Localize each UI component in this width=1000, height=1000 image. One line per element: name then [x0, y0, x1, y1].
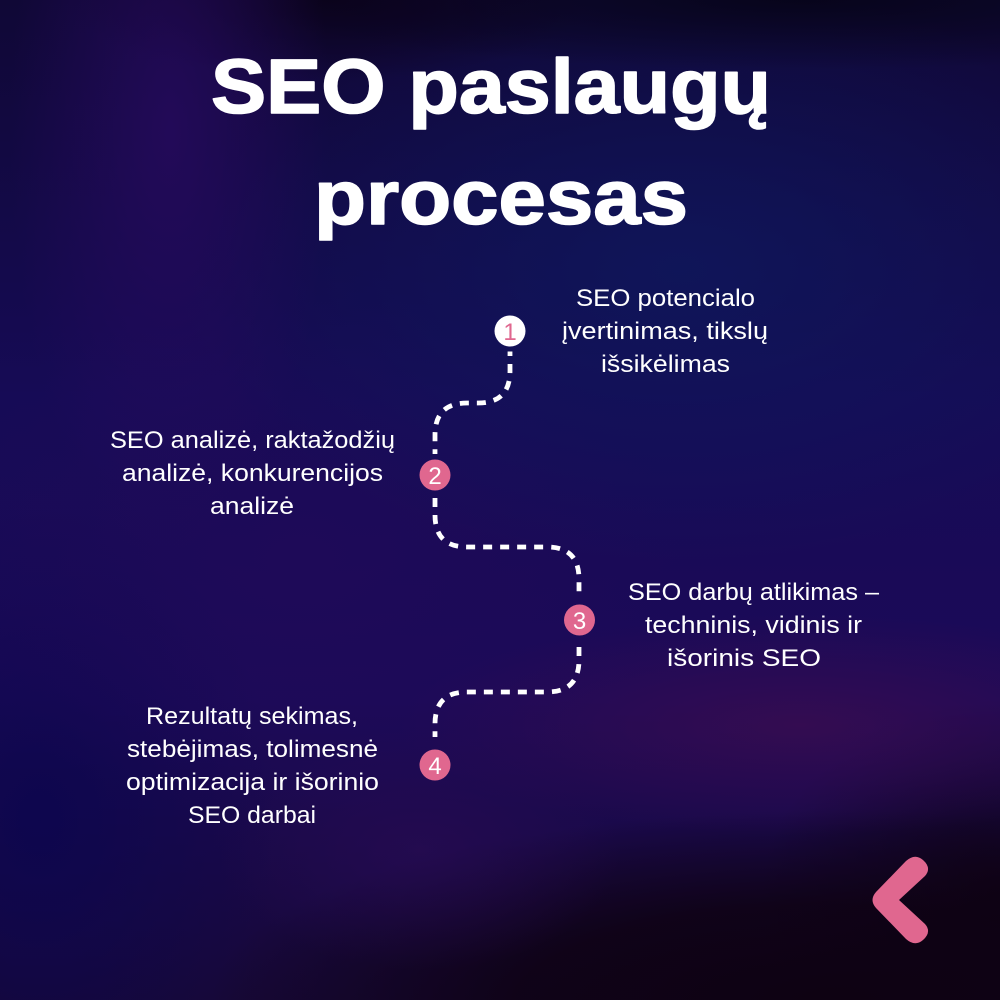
step 1 text: SEO potencialo	[576, 285, 755, 312]
step 3 marker: 3	[573, 608, 586, 635]
step 3 text: SEO darbų atlikimas –	[628, 579, 880, 606]
step 4 text: Rezultatų sekimas,	[146, 703, 358, 730]
step 1 marker	[494, 316, 526, 346]
dashed process path	[435, 352, 579, 737]
step 3 marker	[564, 604, 595, 636]
step 2 marker: 2	[428, 463, 442, 490]
step 4 marker: 4	[428, 753, 442, 780]
step 2 text: analizė, konkurencijos	[122, 460, 383, 487]
step 4 text: optimizacija ir išorinio	[126, 769, 379, 796]
step 2 text	[110, 427, 395, 520]
step 1 marker: 1	[503, 319, 517, 346]
step 1 text	[562, 285, 768, 378]
step 4 text: SEO darbai	[188, 802, 316, 829]
step 1 text: įvertinimas, tikslų	[562, 318, 768, 345]
step 3 text: techninis, vidinis ir	[645, 612, 862, 639]
title	[211, 44, 771, 241]
title: SEO paslaugų	[211, 44, 771, 130]
step 3 text	[628, 579, 880, 672]
step 4 text	[126, 703, 379, 829]
step 2 text: analizė	[210, 493, 294, 520]
step 4 text: stebėjimas, tolimesnė	[127, 736, 378, 763]
title: procesas	[314, 155, 688, 241]
step 1 text: išsikėlimas	[601, 351, 730, 378]
step 3 text: išorinis SEO	[667, 645, 821, 672]
step 2 text: SEO analizė, raktažodžių	[110, 427, 395, 454]
icon: back chevron arrow	[872, 857, 928, 943]
step 2 marker	[420, 460, 450, 490]
step 4 marker	[420, 750, 450, 780]
